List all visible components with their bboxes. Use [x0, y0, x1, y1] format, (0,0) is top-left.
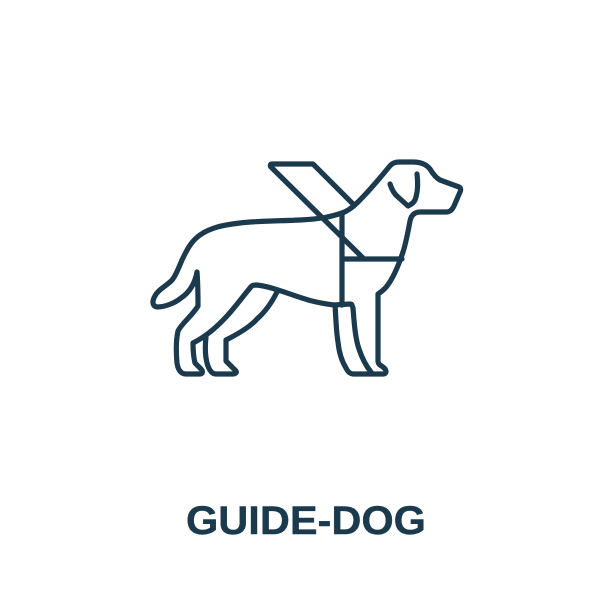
harness vertical strap	[339, 213, 345, 305]
dog body outline	[153, 213, 371, 374]
caption: GUIDE-DOG: GUIDE-DOG	[186, 499, 426, 543]
harness chest strap	[342, 256, 402, 262]
front leg, chest, head and muzzle	[335, 162, 461, 374]
icon: guide dog	[153, 162, 461, 374]
ear	[390, 174, 418, 206]
rear inner leg	[205, 292, 277, 374]
harness handle	[270, 164, 363, 258]
